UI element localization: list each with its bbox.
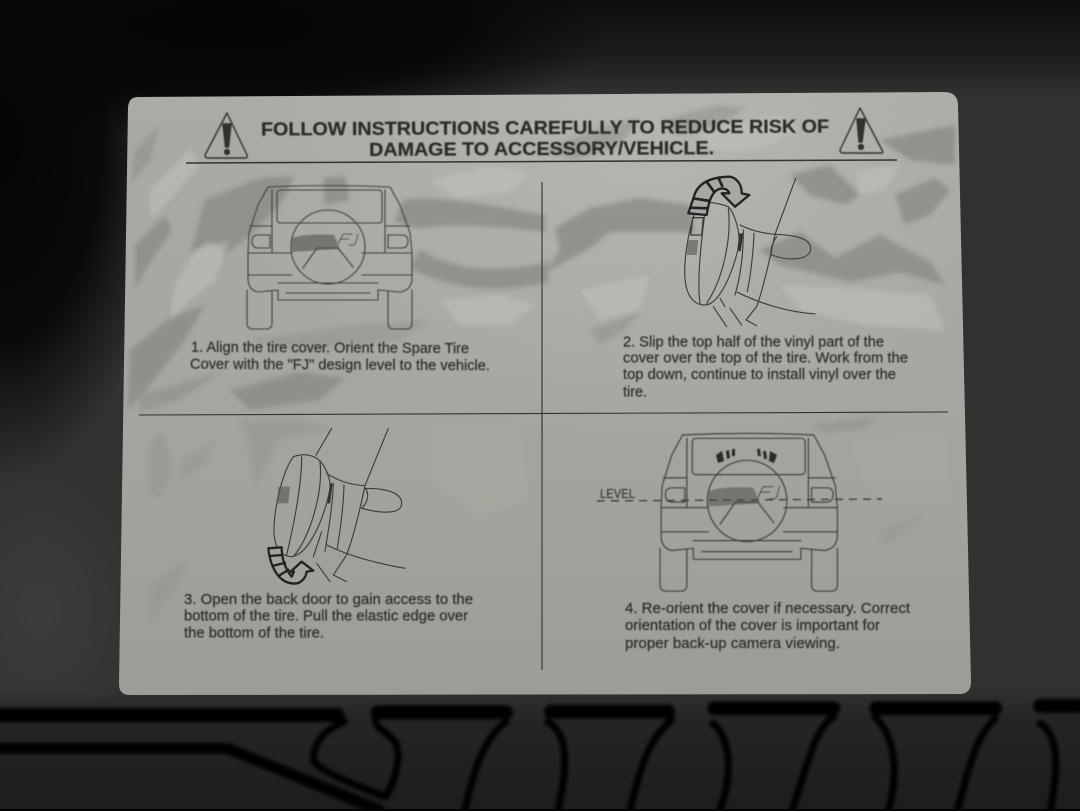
text: step 4: 4. Re-orient the cover if necessary. Correct: [625, 600, 911, 617]
heading: warning title: [261, 116, 829, 160]
text: step 2: top down, continue to install vinyl over the: [623, 366, 896, 383]
text: step 4: orientation of the cover is important for: [625, 617, 880, 634]
text: step 2: tire.: [623, 384, 647, 400]
label: level line: LEVEL: [600, 487, 635, 501]
illustration: step 2 slipping cover over tire top: [685, 177, 815, 327]
text: step 3: the bottom of the tire.: [184, 624, 324, 642]
illustration: step 4 vehicle rear view with level line: [597, 433, 882, 591]
text: step 2: cover over the top of the tire. Work from the: [623, 350, 908, 366]
text: step 3: 3. Open the back door to gain access to the: [184, 591, 473, 608]
text: step 2: 2. Slip the top half of the vinyl part of the: [623, 334, 884, 350]
icon: rotation arrows on window: [716, 449, 777, 463]
text: step 1: [190, 339, 490, 374]
icon: warning triangle left: [205, 113, 247, 158]
text: step 3: bottom of the tire. Pull the elastic edge over: [184, 608, 468, 624]
heading: warning title: DAMAGE TO ACCESSORY/VEHICLE.: [369, 137, 714, 160]
text: step 1: Cover with the "FJ" design level to the vehicle.: [190, 356, 490, 374]
divider grid: [139, 160, 948, 670]
icon: curved arrow pushing up: [268, 547, 313, 584]
text: step 3: [184, 591, 473, 642]
illustration: step 1 vehicle rear view: [247, 186, 412, 329]
panel: instruction sticker: [119, 92, 971, 695]
illustration: step 3 pulling elastic over tire bottom: [268, 428, 405, 584]
icon: curved arrow pushing down: [688, 177, 749, 215]
text: step 2: [623, 334, 908, 400]
molded floor tray with grooves: [0, 690, 1080, 811]
icon: warning triangle right: [840, 108, 883, 153]
text: step 4: proper back-up camera viewing.: [625, 635, 840, 652]
text: step 4: [625, 600, 911, 652]
text: step 1: 1. Align the tire cover. Orient the Spare Tire: [191, 339, 469, 357]
heading: warning title: FOLLOW INSTRUCTIONS CAREFULLY TO REDUCE RISK OF: [261, 116, 829, 139]
